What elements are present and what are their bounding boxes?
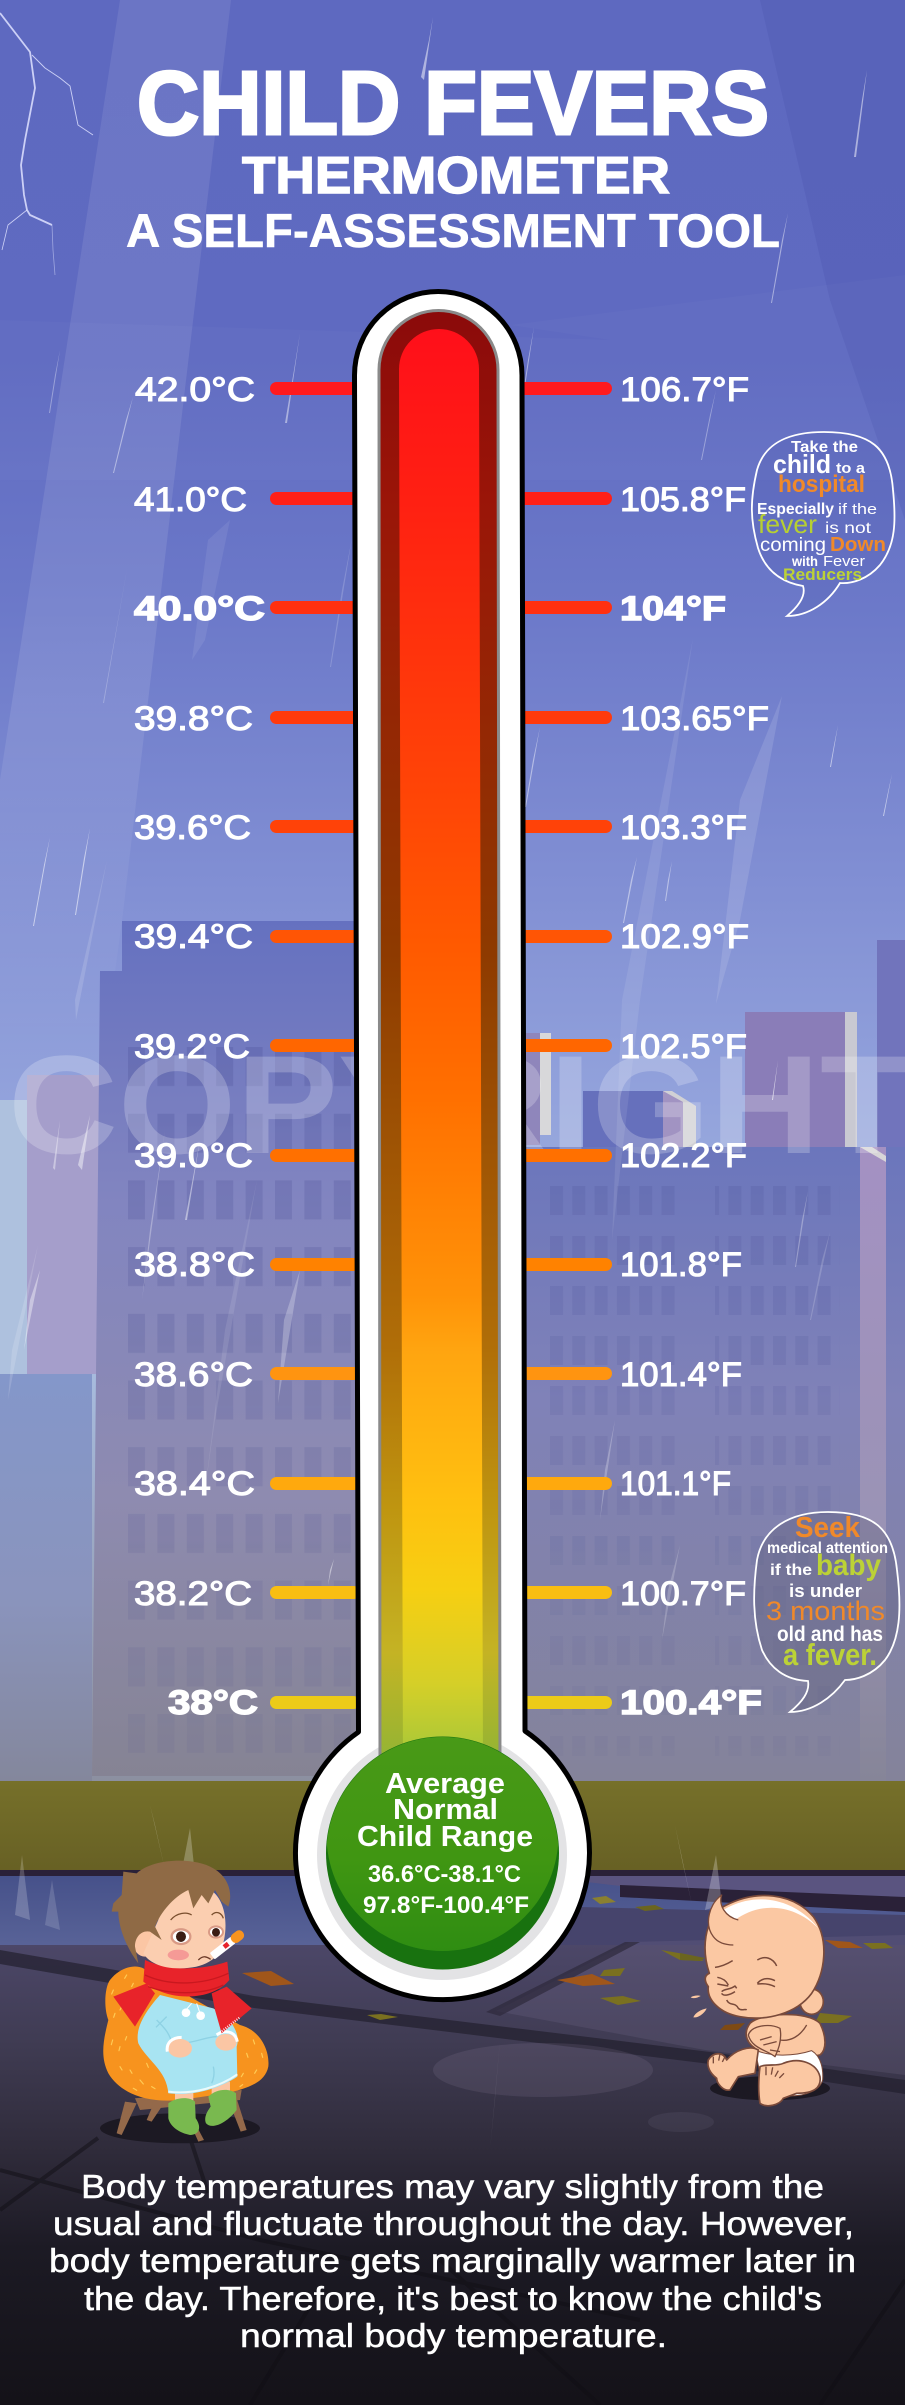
eyes (172, 1929, 190, 1944)
callout: take the child to a hospital: hospital (778, 471, 865, 498)
callout: take the child to a hospital: fever (758, 509, 817, 539)
tears (691, 1995, 707, 2017)
background: olive ground band (0, 1781, 905, 1873)
thermometer (295, 292, 589, 2000)
Fahrenheit scale labels (620, 371, 769, 1722)
callout: seek medical attention (754, 1512, 899, 1712)
Celsius scale labels: 38.2°C (134, 1575, 252, 1613)
Celsius scale labels: 40.0°C (134, 590, 265, 628)
callout: take the child to a hospital: coming (760, 535, 826, 556)
Fahrenheit scale labels: 105.8°F (620, 481, 746, 519)
baby shadow (710, 2076, 830, 2100)
callout: take the child to a hospital: with (791, 553, 818, 569)
bulb text: Child Range (357, 1821, 533, 1853)
boy head (112, 1861, 246, 1968)
boy legs (175, 2082, 230, 2105)
baby torso (746, 2015, 825, 2060)
chair legs (117, 2090, 247, 2142)
callout: take the child to a hospital: Fever (823, 553, 865, 570)
mercury column shadow (379, 311, 500, 1775)
oral thermometer (209, 1928, 246, 1960)
mercury column (399, 329, 483, 1775)
callout: seek medical attention: a fever. (783, 1637, 877, 1672)
red scarf (113, 1960, 252, 2033)
body text paragraph (49, 2168, 856, 2354)
Fahrenheit scale labels: 101.8°F (620, 1246, 742, 1284)
green socks (168, 2090, 237, 2135)
baby toes (713, 2054, 784, 2078)
blue pajamas (138, 1995, 238, 2094)
callout: seek medical attention: Seek (795, 1512, 861, 1544)
Fahrenheit scale labels: 104°F (620, 590, 726, 628)
callout: take the child to a hospital: is not (825, 520, 872, 537)
orange armchair (103, 1966, 268, 2101)
Fahrenheit scale labels: 101.4°F (620, 1356, 742, 1394)
Fahrenheit scale labels: 102.2°F (620, 1137, 747, 1175)
callout: take the child to a hospital: Reducers (783, 565, 862, 584)
callout: take the child to a hospital: Take the (791, 439, 858, 456)
title (126, 54, 780, 257)
body text paragraph: usual and fluctuate throughout the day. However, (53, 2205, 854, 2242)
bulb text: Average (385, 1768, 505, 1800)
diaper (755, 2050, 823, 2096)
callout: take the child to a hospital: to a (836, 460, 866, 477)
bulb text: 97.8°F-100.4°F (363, 1892, 529, 1919)
baby hands (748, 2026, 781, 2057)
callout: seek medical attention: old and has (777, 1623, 883, 1646)
background: street and pavement (0, 1870, 905, 2405)
hands and cuffs (167, 2032, 237, 2058)
baby face (715, 1958, 777, 2010)
callout: seek medical attention: medical attention (767, 1540, 888, 1557)
cheek (168, 1950, 189, 1960)
title: CHILD FEVERS (137, 54, 769, 154)
thermometer glass body (295, 292, 589, 2000)
subtitle: self-assessment tool: A SELF-ASSESSMENT TOOL (126, 204, 780, 257)
Celsius scale labels: 39.2°C (134, 1028, 250, 1066)
callout: take the child to a hospital (752, 432, 895, 616)
callout: take the child to a hospital: Especially (757, 501, 834, 518)
temperature tick marks (270, 382, 612, 1709)
baby ear (800, 1989, 823, 2014)
bulb grey ring (317, 1730, 567, 1980)
background: city buildings (0, 921, 905, 1783)
hair (112, 1861, 230, 1963)
green bulb (326, 1719, 559, 1970)
Celsius scale labels: 38.6°C (134, 1356, 253, 1394)
Fahrenheit scale labels: 100.7°F (620, 1575, 746, 1613)
body text paragraph: Body temperatures may vary slightly from the (81, 2168, 824, 2205)
Celsius scale labels: 41.0°C (134, 481, 247, 519)
baby head (705, 1896, 824, 2018)
Celsius scale labels: 39.6°C (134, 809, 251, 847)
Fahrenheit scale labels: 101.1°F (620, 1465, 731, 1503)
illustration: crying baby (691, 1895, 830, 2106)
Celsius scale labels (134, 371, 265, 1722)
Celsius scale labels: 38.8°C (134, 1246, 255, 1284)
bulb text: Normal (393, 1794, 498, 1826)
body text paragraph: normal body temperature. (240, 2317, 667, 2354)
lightning bolt (0, 13, 93, 275)
Fahrenheit scale labels: 106.7°F (620, 371, 749, 409)
Celsius scale labels: 39.4°C (134, 918, 253, 956)
callout: take the child to a hospital: Down (830, 534, 886, 556)
watermark: COPYRIGHT: COPYRIGHT (8, 1026, 905, 1183)
callout: take the child to a hospital: child (773, 449, 831, 479)
bulb text (357, 1768, 533, 1919)
Fahrenheit scale labels: 102.9°F (620, 918, 749, 956)
baby left leg (708, 2048, 758, 2090)
body text paragraph: body temperature gets marginally warmer later in (49, 2242, 856, 2279)
callout: seek medical attention: 3 months (766, 1596, 885, 1626)
hair curl (708, 1895, 738, 1945)
Celsius scale labels: 39.8°C (134, 700, 253, 738)
callout: take the child to a hospital: if the (838, 501, 877, 518)
Celsius scale labels: 38°C (168, 1684, 258, 1722)
fallen leaves (242, 1896, 893, 2030)
callout: seek medical attention: baby (816, 1549, 881, 1582)
Fahrenheit scale labels: 103.65°F (620, 700, 769, 738)
background: stormy sky (0, 0, 905, 1790)
illustration: sick boy in armchair (100, 1861, 268, 2143)
bulb text: 36.6°C-38.1°C (368, 1861, 521, 1888)
Fahrenheit scale labels: 103.3°F (620, 809, 747, 847)
subtitle: thermometer: THERMOMETER (242, 147, 670, 205)
Fahrenheit scale labels: 100.4°F (620, 1684, 762, 1722)
Celsius scale labels: 39.0°C (134, 1137, 253, 1175)
Celsius scale labels: 42.0°C (135, 371, 255, 409)
callout: seek medical attention: if the (770, 1562, 812, 1579)
pom poms (182, 2003, 205, 2020)
baby right leg (759, 2061, 820, 2106)
hair highlight (723, 1899, 818, 1928)
Fahrenheit scale labels: 102.5°F (620, 1028, 747, 1066)
Celsius scale labels: 38.4°C (134, 1465, 255, 1503)
body text paragraph: the day. Therefore, it's best to know the child's (84, 2280, 822, 2317)
callout: seek medical attention: is under (789, 1581, 862, 1601)
boy shadow (100, 2113, 260, 2143)
